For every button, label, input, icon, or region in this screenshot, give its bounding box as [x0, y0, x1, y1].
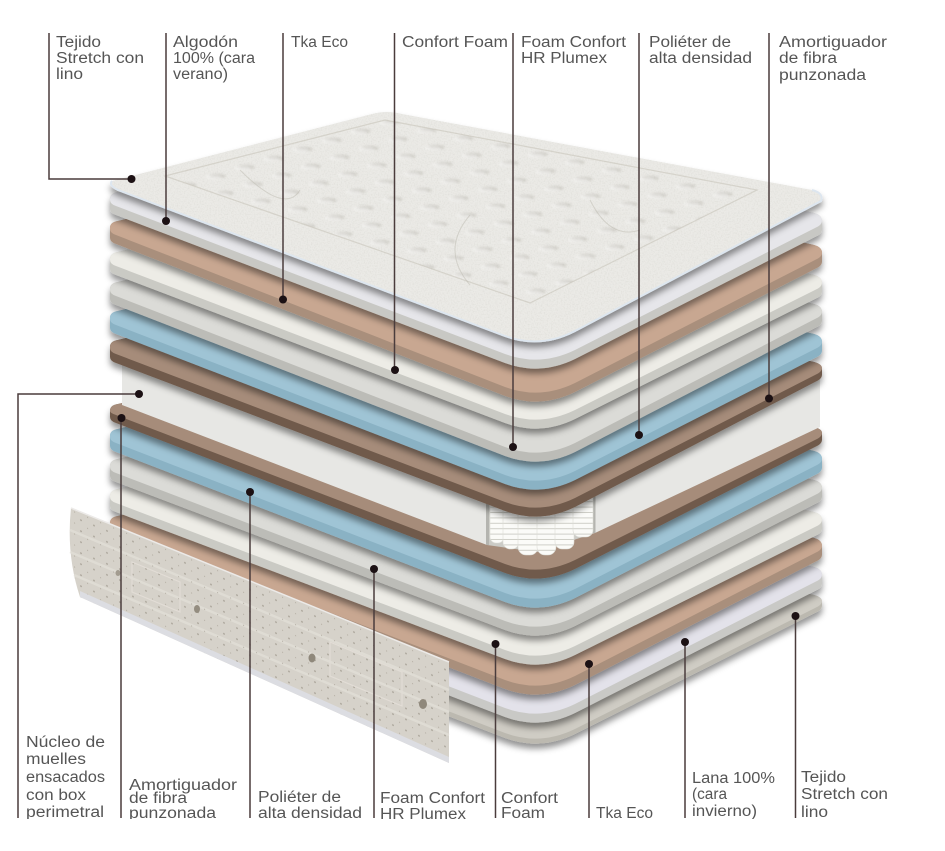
callout: Tka Eco (top): Tka Eco [291, 34, 348, 51]
callout: Amortiguador de fibra punzonada (bottom) [118, 414, 237, 822]
callout: Tka Eco (bottom): Tka Eco [596, 805, 653, 822]
callout: Foam Confort HR Plumex (bottom): HR Plumex [380, 806, 466, 823]
callout: Lana 100% (cara invierno) [681, 638, 775, 820]
layer: lower blue polyether [110, 360, 822, 608]
callout: Poliéter de alta densidad (top) [635, 33, 752, 439]
callout: Núcleo de muelles ensacados con box perimetral: Núcleo de [26, 734, 105, 751]
callout: Tka Eco (top) [279, 33, 348, 304]
callout: Lana 100% (cara invierno): (cara [692, 786, 727, 803]
layer: upper tan Tka Eco [110, 152, 822, 402]
callout: Poliéter de alta densidad (bottom): alta densidad [258, 805, 362, 822]
callout: Foam Confort HR Plumex (bottom) [370, 565, 486, 823]
callout: Poliéter de alta densidad (top): Poliéter de [649, 34, 731, 51]
layer: lower brown fibre [110, 335, 822, 579]
spring core with perimeter box [122, 352, 820, 555]
callout: Amortiguador de fibra punzonada (top) [765, 33, 887, 402]
callout: Tejido Stretch con lino (top): lino [56, 66, 83, 83]
callout: Confort Foam (bottom) [492, 640, 559, 822]
callout: Foam Confort HR Plumex (top) [509, 33, 627, 451]
icon: pocket springs [490, 480, 593, 555]
top quilted stretch fabric [111, 110, 822, 341]
callout: Tejido Stretch con lino (bottom) [792, 612, 888, 821]
layer: lower grey foam [110, 390, 822, 636]
callout: Foam Confort HR Plumex (bottom): Foam Confort [380, 790, 486, 807]
callout: Confort Foam (bottom): Foam [501, 805, 545, 822]
layer: cotton [110, 123, 822, 369]
layer: upper brown fibre [110, 271, 822, 517]
layer: lower tan Tka Eco [110, 447, 822, 695]
layer: upper cream confort foam [110, 183, 822, 429]
callout: Tejido Stretch con lino (bottom): Tejido [801, 769, 846, 786]
callout: Poliéter de alta densidad (top): alta densidad [649, 50, 752, 67]
callout: Confort Foam (bottom): Confort [501, 790, 559, 807]
callout: Poliéter de alta densidad (bottom) [246, 488, 362, 822]
callout: Tka Eco (bottom) [585, 660, 653, 822]
callout: Lana 100% (cara invierno): invierno) [692, 803, 757, 820]
callout: Poliéter de alta densidad (bottom): Poliéter de [258, 789, 341, 806]
callout: Núcleo de muelles ensacados con box perimetral: muelles [26, 751, 86, 768]
callout: Núcleo de muelles ensacados con box perimetral [18, 390, 143, 821]
layer: upper blue polyether [110, 242, 822, 490]
callout: Amortiguador de fibra punzonada (top): Amortiguador [779, 34, 887, 51]
callout: Amortiguador de fibra punzonada (top): de fibra [779, 50, 837, 67]
mattress layers stack [110, 110, 822, 744]
callout: Tejido Stretch con lino (bottom): lino [801, 804, 828, 821]
callout: Tejido Stretch con lino (top): Stretch con [56, 50, 144, 67]
callout: Algodón 100% (cara verano): Algodón [173, 34, 238, 51]
callout: Lana 100% (cara invierno): Lana 100% [692, 770, 775, 787]
layer: lower cream confort foam [110, 420, 822, 665]
callout: Amortiguador de fibra punzonada (bottom): punzonada [129, 805, 216, 822]
callout: Confort Foam (top) [391, 33, 508, 374]
callout: Foam Confort HR Plumex (top): Foam Confort [521, 34, 627, 51]
callout: Tejido Stretch con lino (top) [49, 33, 144, 183]
callout: Amortiguador de fibra punzonada (bottom): de fibra [129, 790, 187, 807]
callout: Algodón 100% (cara verano) [162, 33, 255, 225]
callout: Núcleo de muelles ensacados con box perimetral: con box [26, 787, 86, 804]
callout: Amortiguador de fibra punzonada (top): punzonada [779, 67, 866, 84]
callout: Núcleo de muelles ensacados con box perimetral: ensacados [26, 769, 105, 786]
callout: Amortiguador de fibra punzonada (bottom): Amortiguador [129, 777, 237, 794]
layer: bottom taupe stretch fabric [110, 502, 822, 744]
callout: Foam Confort HR Plumex (top): HR Plumex [521, 50, 607, 67]
callout: Tejido Stretch con lino (top): Tejido [56, 34, 101, 51]
callout: Núcleo de muelles ensacados con box perimetral: perimetral [26, 804, 104, 821]
callout: Algodón 100% (cara verano): 100% (cara [173, 50, 255, 67]
layer: upper grey foam [110, 213, 822, 462]
callout: Tejido Stretch con lino (bottom): Stretch con [801, 786, 888, 803]
layer: wool [110, 475, 822, 723]
callout: Confort Foam (top): Confort Foam [402, 34, 508, 51]
callout: Algodón 100% (cara verano): verano) [173, 66, 228, 83]
side panel: perimeter box fabric [70, 508, 449, 763]
